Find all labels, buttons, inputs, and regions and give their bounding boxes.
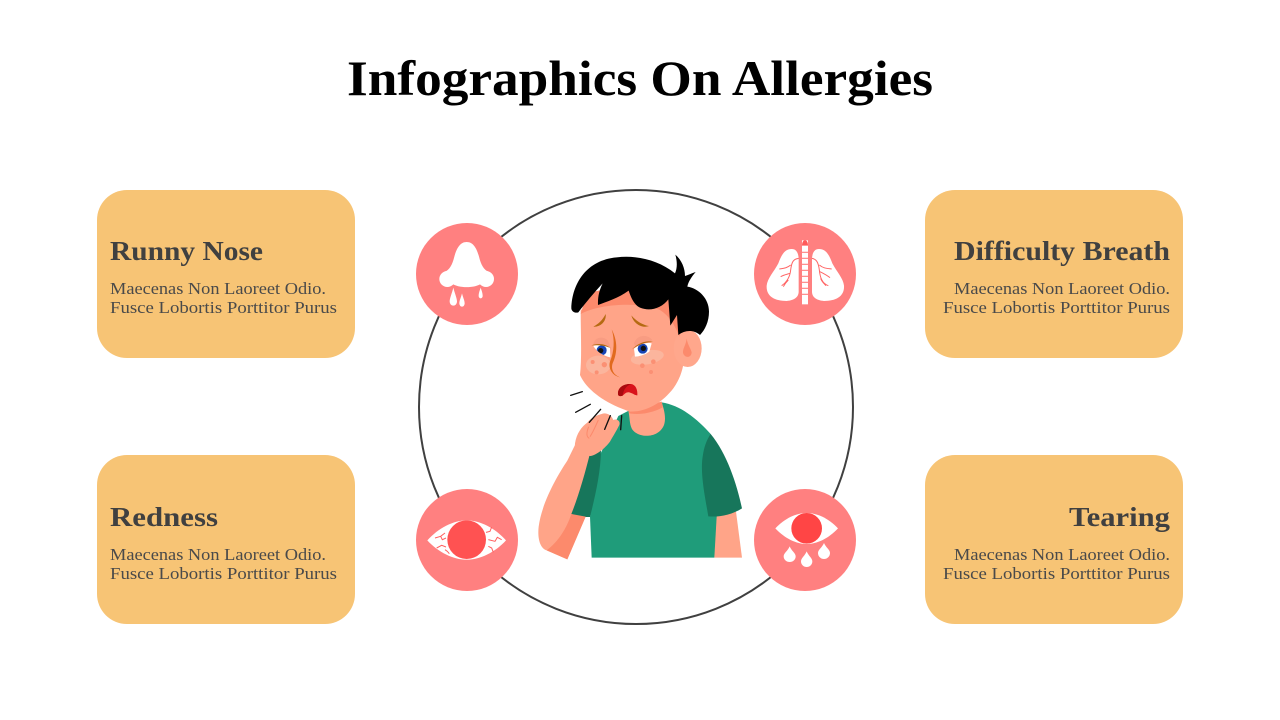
inner ear — [683, 339, 692, 357]
panel: difficulty breath: Fusce Lobortis Porttitor Purus — [943, 298, 1170, 317]
neck shadow — [629, 402, 663, 414]
left arm — [538, 445, 591, 559]
bronchi — [779, 258, 832, 287]
right arm — [713, 512, 742, 558]
panel: difficulty breath: Maecenas Non Laoreet Odio. — [954, 279, 1170, 298]
panel: difficulty breath — [925, 190, 1183, 358]
tear drops — [784, 543, 830, 567]
left eye — [591, 344, 611, 357]
windpipe rings — [802, 252, 808, 294]
panel: redness: Maecenas Non Laoreet Odio. — [110, 545, 326, 564]
right eye — [632, 341, 653, 357]
eye white — [427, 520, 506, 560]
illustration: coughing boy — [538, 255, 742, 559]
cough lines — [571, 392, 622, 430]
right lung — [812, 249, 844, 301]
ear — [674, 330, 702, 367]
hand — [575, 413, 620, 456]
panel: runny nose: Maecenas Non Laoreet Odio. — [110, 279, 326, 298]
left sleeve — [571, 450, 601, 517]
panel: difficulty breath: Difficulty Breath — [954, 236, 1170, 266]
central ring — [419, 190, 853, 624]
neck — [628, 402, 665, 436]
face — [580, 293, 684, 412]
shirt — [590, 402, 717, 558]
icon: lungs — [754, 223, 856, 325]
windpipe — [802, 240, 808, 304]
panel: tearing: Maecenas Non Laoreet Odio. — [954, 545, 1170, 564]
panel: runny nose: Runny Nose — [110, 236, 263, 266]
panel: redness — [97, 455, 355, 624]
drops — [450, 288, 483, 307]
icon: tearing eye — [754, 489, 856, 591]
nose — [439, 242, 494, 287]
panel: runny nose — [97, 190, 355, 358]
panel: tearing: Fusce Lobortis Porttitor Purus — [943, 564, 1170, 583]
title: Infographics On Allergies — [347, 50, 933, 106]
veins — [435, 527, 502, 554]
forearm shadow — [547, 514, 586, 559]
left lung — [767, 249, 799, 301]
panel: redness: Redness — [110, 502, 218, 532]
mouth — [618, 384, 637, 396]
cheeks — [586, 356, 611, 374]
nose line — [609, 329, 620, 377]
panel: runny nose: Fusce Lobortis Porttitor Purus — [110, 298, 337, 317]
eye sockets — [593, 338, 611, 355]
hair — [571, 255, 709, 335]
forehead shadow — [581, 283, 687, 337]
right sleeve — [702, 434, 742, 517]
iris — [791, 513, 822, 544]
panel: tearing — [925, 455, 1183, 624]
panel: redness: Fusce Lobortis Porttitor Purus — [110, 564, 337, 583]
icon: red eye — [416, 489, 518, 591]
finger lines — [587, 420, 598, 438]
freckles — [591, 359, 656, 374]
eyebrows — [593, 314, 606, 327]
panel: tearing: Tearing — [1069, 502, 1171, 532]
eye white — [775, 513, 838, 544]
icon: runny nose — [416, 223, 518, 325]
iris — [447, 520, 486, 559]
